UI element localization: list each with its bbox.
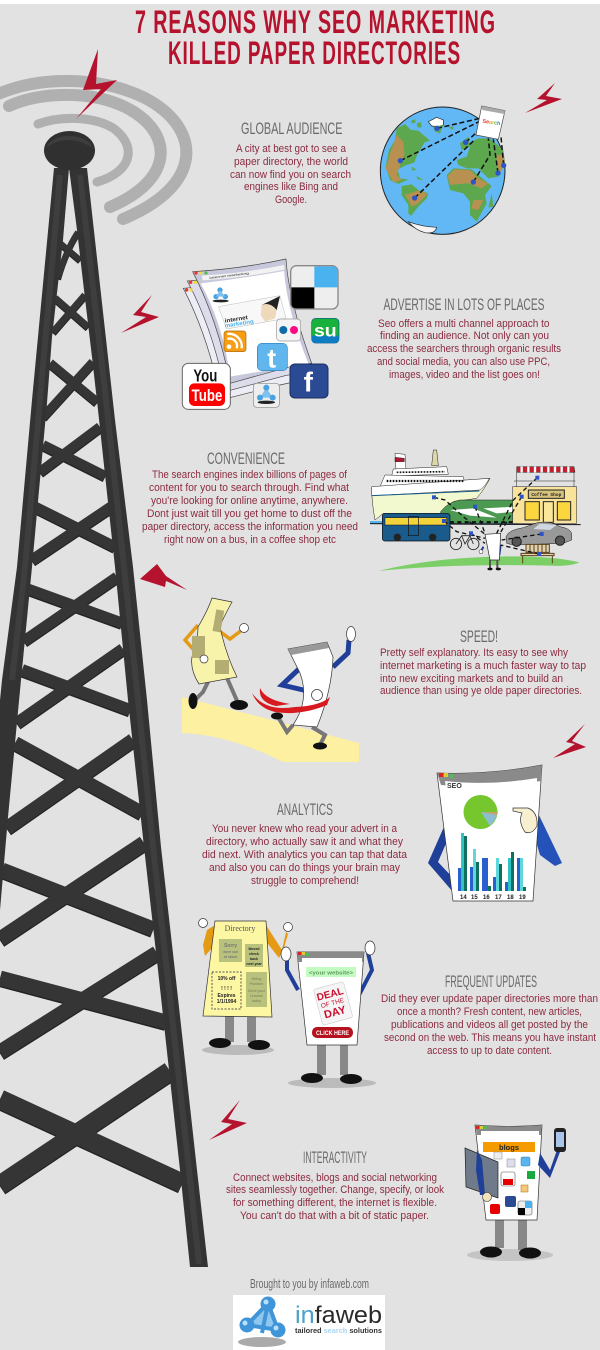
panel: frequent updates xyxy=(198,918,598,1088)
page logo xyxy=(213,287,229,302)
panel: analytics xyxy=(202,765,562,901)
text block: images, video and the list goes on! xyxy=(389,369,540,381)
radio tower xyxy=(0,131,208,1267)
text block: access the searchers through organic results xyxy=(367,343,561,355)
coffee shop: Coffee Shop xyxy=(531,492,562,498)
coffee shop xyxy=(513,467,577,523)
directory character illustration: Sorry xyxy=(224,943,237,949)
bus xyxy=(382,513,450,541)
icon: facebook xyxy=(290,364,328,398)
icon: lightning bolt xyxy=(525,83,562,113)
text block xyxy=(367,318,561,381)
website character illustration: <your website> xyxy=(309,970,353,976)
tower leg highlights xyxy=(12,175,199,1264)
page xyxy=(437,765,542,901)
text block: and also you can do things your brain may xyxy=(209,862,400,874)
panel: speed xyxy=(182,598,586,762)
icon: stumbleupon: su xyxy=(314,320,337,340)
text block: paper directory, access the information you need xyxy=(142,521,358,533)
tower cross braces xyxy=(0,232,182,1185)
click here button: CLICK HERE xyxy=(316,1031,349,1037)
website runner xyxy=(252,626,356,750)
bar chart: 16 xyxy=(483,895,490,901)
directory character illustration: 10% off xyxy=(218,976,236,982)
text block: for something different, the internet is flexible. xyxy=(233,1197,437,1209)
text block: can now find you on search xyxy=(230,169,351,181)
bar chart: 14 xyxy=(460,895,467,901)
banner xyxy=(218,296,286,329)
blue arms xyxy=(476,1150,485,1195)
text block: Connect websites, blogs and social networking xyxy=(233,1172,437,1184)
text block xyxy=(381,993,598,1057)
text block: finding an audience. Not only can you xyxy=(380,330,549,342)
deal of the day tag xyxy=(313,982,353,1025)
icon: delicious xyxy=(291,266,338,309)
click here button xyxy=(312,1027,353,1038)
logo wordmark: infaweb xyxy=(295,1302,382,1329)
icon: lightning bolt xyxy=(553,724,586,758)
ship xyxy=(372,450,490,520)
text block: you're looking for online anytime, anywhere. xyxy=(151,495,348,507)
directory character illustration: Hiring xyxy=(251,977,262,981)
text block: Google. xyxy=(275,194,307,206)
bench xyxy=(521,544,554,563)
ground xyxy=(378,556,579,571)
deal of the day tag: OF THE xyxy=(320,997,346,1010)
text block: access to up to date content. xyxy=(427,1045,552,1057)
town scene illustration xyxy=(370,450,581,571)
text block: into new exciting markets and to build an xyxy=(380,673,563,685)
bar chart: 19 xyxy=(519,895,526,901)
bar chart: 18 xyxy=(507,895,514,901)
icon: youtube xyxy=(182,363,230,409)
signal lines xyxy=(434,478,542,554)
text block xyxy=(202,823,408,887)
bar chart: 17 xyxy=(495,895,502,901)
directory character illustration: check xyxy=(249,952,259,956)
icon: twitter xyxy=(257,343,287,374)
tower ball xyxy=(44,131,95,170)
icon: tower lightning bolt xyxy=(76,49,117,119)
icon: flickr xyxy=(277,319,301,341)
text block: paper directory, the world xyxy=(234,156,348,168)
directory character illustration: Send your xyxy=(248,989,266,993)
text block: and social media, you can also use PPC, xyxy=(377,356,550,368)
text block: A city at best got to see a xyxy=(236,143,347,155)
directory character illustration xyxy=(198,918,292,1055)
icon: facebook: f xyxy=(304,367,314,398)
pie chart xyxy=(464,795,498,829)
heading: INTERACTIVITY xyxy=(303,1149,367,1167)
directory runner xyxy=(185,598,248,710)
bar chart: 15 xyxy=(471,895,478,901)
footer credit: Brought to you by infaweb.com xyxy=(250,1277,369,1291)
phone xyxy=(554,1128,566,1152)
icon: twitter: t xyxy=(267,344,276,374)
heading: ANALYTICS xyxy=(277,801,333,819)
text block: did next. With analytics you can tap that data xyxy=(202,849,408,861)
hand xyxy=(513,808,537,833)
tower right leg xyxy=(69,168,208,1267)
blue arms xyxy=(428,820,455,892)
icon: youtube: You xyxy=(193,366,217,386)
directory character illustration: back xyxy=(250,957,258,961)
bicycle xyxy=(450,536,479,550)
text block: engines like Bing and xyxy=(244,181,338,193)
title xyxy=(135,4,496,71)
text block: The search engines index billions of pages of xyxy=(152,469,348,481)
heading: CONVENIENCE xyxy=(207,450,285,468)
icon: youtube: Tube xyxy=(192,386,222,405)
text block: Seo offers a multi channel approach to xyxy=(378,318,550,330)
directory character illustration: resume xyxy=(250,994,263,998)
directory character illustration: ! ! ! ! xyxy=(221,986,232,992)
analytics page illustration xyxy=(428,765,562,901)
text block: Dont just wait till you get home to dust off the xyxy=(147,508,352,520)
heading: SPEED! xyxy=(460,628,498,646)
radio waves xyxy=(0,81,186,219)
blogs character illustration xyxy=(465,1125,566,1261)
location dots xyxy=(432,476,544,556)
paper: Search xyxy=(482,119,501,127)
text block: You can't do that with a bit of static paper. xyxy=(240,1210,429,1222)
location dots xyxy=(398,126,506,201)
heading: GLOBAL AUDIENCE xyxy=(241,120,342,138)
text block: You never knew who read your advert in a xyxy=(212,823,398,835)
train xyxy=(441,500,518,523)
browser pages and social icons illustration xyxy=(182,259,339,409)
logo molecule xyxy=(238,1296,286,1347)
directory character illustration: next year xyxy=(246,962,262,966)
icon: rss xyxy=(224,331,246,352)
tower left leg xyxy=(0,168,69,910)
directory character illustration: Plumber xyxy=(249,982,264,986)
text block xyxy=(142,469,358,546)
directory character illustration: Directory xyxy=(225,924,255,933)
panel: convenience xyxy=(140,450,581,590)
tower cross braces shadow xyxy=(0,234,182,1186)
browser pages and social icons illustration: internet marketing xyxy=(209,271,249,280)
icon: lightning bolt xyxy=(209,1100,247,1140)
icon: lightning bolt xyxy=(140,564,187,590)
analytics page illustration: SEO xyxy=(447,783,462,790)
text block: content for you to search through. Find what xyxy=(149,482,350,494)
deal of the day tag: DAY xyxy=(323,1004,348,1021)
directory character illustration: of stock xyxy=(224,955,237,959)
panel: advertise in lots of places xyxy=(121,259,561,409)
icon: infaweb app xyxy=(253,383,279,407)
directory character illustration: 1/1/1994 xyxy=(217,999,236,1005)
icon: stumbleupon xyxy=(312,318,339,343)
text block xyxy=(380,647,586,697)
text block xyxy=(230,143,351,206)
race illustration xyxy=(182,598,359,762)
text block: struggle to comprehend! xyxy=(251,875,359,887)
small social icons xyxy=(490,1152,535,1215)
paper character xyxy=(479,533,501,570)
text block: directory, who actually saw it and what they xyxy=(206,836,403,848)
infaweb logo xyxy=(233,1295,385,1350)
road xyxy=(182,697,359,762)
browser pages and social icons illustration: marketing xyxy=(224,319,255,330)
icon: lightning bolt xyxy=(121,295,159,333)
text block: internet marketing is a much faster way to tap xyxy=(380,660,586,672)
browser pages and social icons illustration: internet xyxy=(224,315,248,325)
logo tagline: tailored search solutions xyxy=(295,1328,382,1335)
directory character illustration: Expires xyxy=(217,993,236,999)
text block: right now on a bus, in a coffee shop etc xyxy=(164,534,336,546)
directory character illustration: today xyxy=(252,999,261,1003)
text block xyxy=(226,1172,444,1222)
panel: interactivity xyxy=(209,1100,566,1261)
car xyxy=(506,522,572,546)
globe illustration xyxy=(380,106,506,234)
deal of the day tag: DEAL xyxy=(316,986,345,1004)
text block: sites seamlessly together. Change, specify, or look xyxy=(226,1184,444,1196)
directory character illustration: Moved xyxy=(248,947,260,951)
bar chart xyxy=(458,833,526,901)
panel: global audience xyxy=(230,83,562,234)
tablet xyxy=(465,1148,498,1198)
directory character illustration: were out xyxy=(222,950,239,954)
flight paths xyxy=(400,118,504,198)
text block: Pretty self explanatory. Its easy to see why xyxy=(380,647,568,659)
website character illustration xyxy=(281,941,376,1088)
blogs character illustration: blogs xyxy=(499,1143,519,1152)
